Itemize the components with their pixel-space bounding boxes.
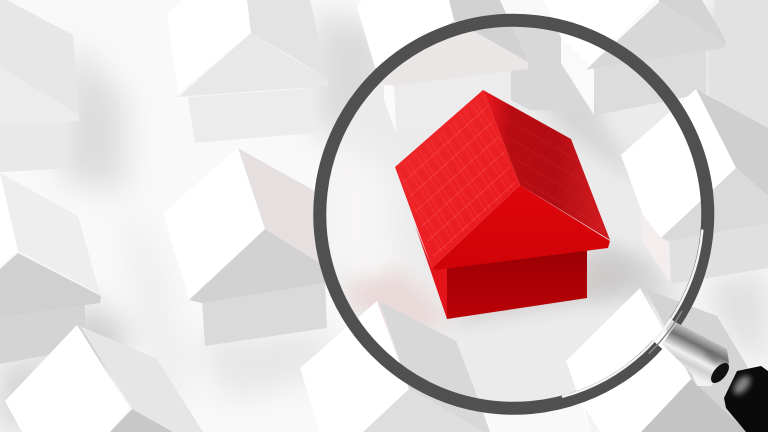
roof bright slope: [544, 0, 654, 70]
roof shaded slope: [696, 89, 768, 196]
handle neck mark: [706, 352, 718, 362]
roof bright slope: [167, 0, 251, 93]
handle collar: [708, 360, 732, 386]
gable: [378, 20, 528, 86]
lens interior: [327, 26, 689, 402]
handle grip: [724, 366, 768, 432]
gable: [363, 389, 484, 432]
lens rim inner highlight: [563, 230, 702, 397]
roof shaded slope: [380, 302, 490, 432]
red house: front wall: [447, 248, 587, 319]
wall: [188, 88, 313, 143]
red house: left roof tiles: [398, 94, 517, 260]
house: bottom left: [5, 325, 203, 432]
gable: [586, 2, 726, 70]
handle neck: [662, 323, 729, 386]
roof shaded slope: [646, 289, 768, 432]
house: right: [621, 89, 768, 284]
wall: [0, 122, 68, 172]
house: far left: [0, 173, 101, 364]
roof shaded slope: [238, 148, 344, 278]
house: top right: [544, 0, 726, 115]
lens rim: [320, 20, 708, 408]
red house shadow: [450, 248, 640, 325]
wall: [0, 302, 85, 364]
house: top centre: [357, 0, 528, 132]
side wall: [641, 205, 671, 284]
red house: right roof slope: [483, 90, 610, 240]
gable: [661, 168, 768, 241]
gable: [189, 229, 344, 303]
side sliver: [584, 406, 600, 432]
side wall: [561, 37, 594, 115]
roof bright slope: [300, 301, 409, 432]
roof slope: [0, 0, 79, 115]
roof shaded slope: [247, 0, 328, 78]
wall: [202, 282, 327, 346]
wall: [394, 71, 511, 132]
house: centre left: [163, 148, 344, 346]
lens rim thin edge across handle joint: [649, 311, 682, 354]
red house: side wall: [415, 225, 447, 319]
house: top centre left: [167, 0, 328, 143]
roof shaded slope: [0, 173, 100, 294]
roof shaded slope: [80, 326, 203, 432]
wall: [669, 221, 768, 284]
roof bright slope: [163, 148, 265, 299]
gable: [0, 67, 79, 126]
roof bright slope: [621, 89, 736, 238]
wall: [594, 48, 706, 115]
roof bright slope: [5, 325, 129, 432]
side wall: [384, 84, 396, 132]
gable: [0, 253, 101, 317]
lens: light and shadow patches: [320, 60, 670, 340]
house: top left: [0, 0, 79, 172]
shadow behind top house: [511, 26, 562, 110]
house: bottom centre: [300, 301, 490, 432]
handle grip highlight: [730, 373, 754, 397]
lens background: [336, 50, 689, 402]
magnifying glass: [320, 20, 768, 432]
roof shaded slope: [449, 0, 528, 62]
house: bottom right: [566, 288, 768, 432]
red house: right roof tiles: [492, 98, 606, 236]
gable: [178, 33, 328, 97]
red house: left roof slope: [395, 90, 520, 268]
gable: [641, 379, 747, 432]
roof bright slope: [357, 0, 454, 78]
red house: [395, 90, 610, 319]
red house: gable: [432, 185, 610, 270]
roof bright slope: [566, 288, 691, 432]
roof shaded slope: [659, 0, 726, 43]
surface right of lens: [709, 0, 768, 128]
roof bright slope: [0, 175, 18, 265]
gable: [110, 409, 173, 432]
